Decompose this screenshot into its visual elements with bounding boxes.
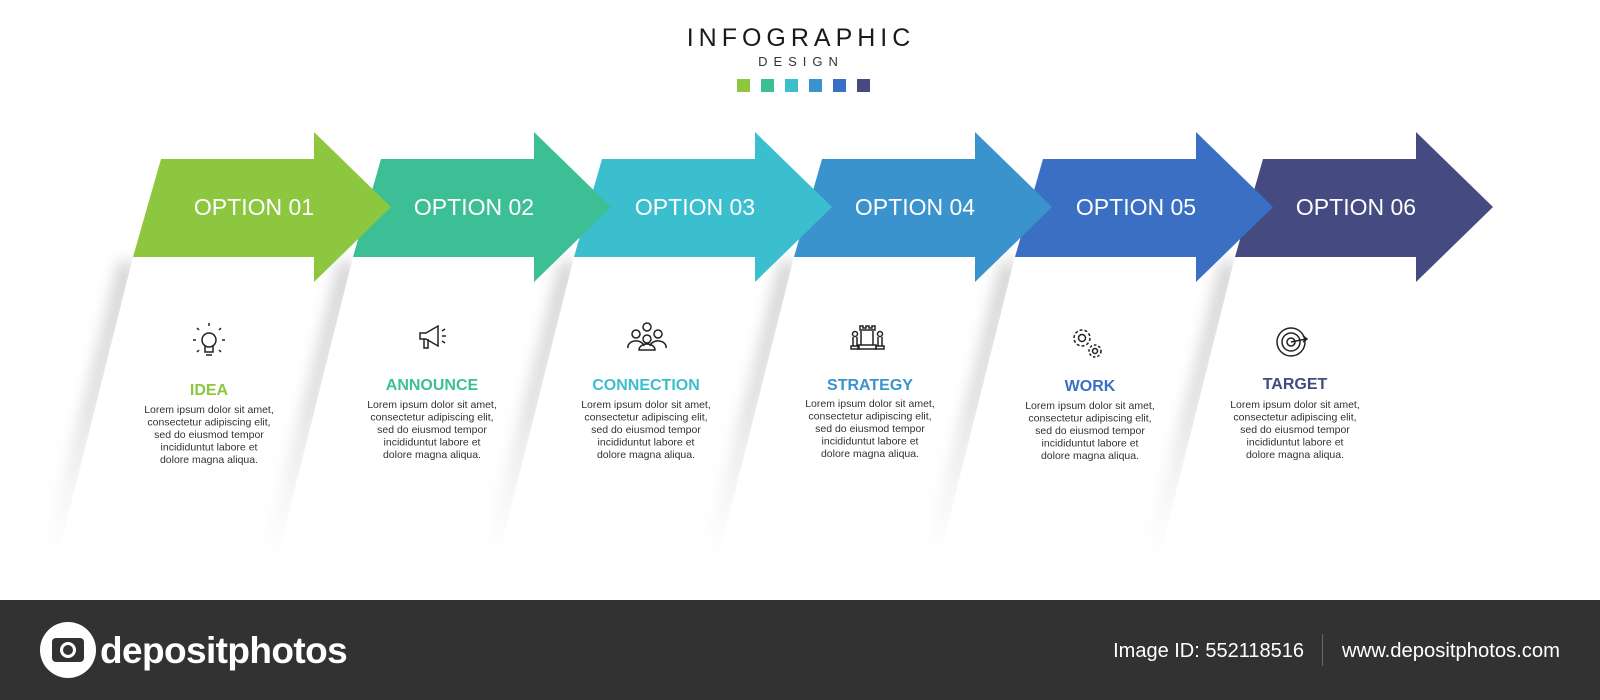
panels with shadows [46, 257, 1500, 556]
text: connection: sed do eiusmod tempor [591, 424, 701, 436]
text: announce: sed do eiusmod tempor [377, 424, 487, 436]
text: announce [367, 377, 497, 461]
text: target: Lorem ipsum dolor sit amet, [1230, 399, 1360, 411]
arrow 01 [133, 132, 391, 282]
title [687, 24, 915, 69]
text: strategy: Lorem ipsum dolor sit amet, [805, 398, 935, 410]
text: target: incididuntut labore et [1247, 436, 1344, 448]
logo [40, 622, 347, 678]
title: DESIGN [758, 54, 844, 69]
text: announce: ANNOUNCE [386, 377, 479, 394]
text: target [1230, 376, 1360, 461]
text: work: incididuntut labore et [1042, 438, 1139, 450]
arrow 06: OPTION 06 [1296, 194, 1416, 220]
text: idea: incididuntut labore et [161, 442, 258, 454]
icon: chess [851, 326, 884, 349]
text: connection [581, 377, 711, 461]
text: work: Lorem ipsum dolor sit amet, [1025, 400, 1155, 412]
icon: gears [1074, 330, 1101, 357]
text: announce: incididuntut labore et [384, 436, 481, 448]
text: idea: Lorem ipsum dolor sit amet, [144, 404, 274, 416]
text: strategy: STRATEGY [827, 377, 913, 394]
website: www.depositphotos.com [1341, 640, 1560, 662]
arrow 03: OPTION 03 [635, 194, 755, 220]
text: strategy [805, 377, 935, 460]
icon: lightbulb [193, 323, 225, 355]
arrow 05: OPTION 05 [1076, 194, 1196, 220]
text: target: TARGET [1263, 376, 1328, 393]
text: announce: dolore magna aliqua. [383, 449, 481, 461]
text: work: dolore magna aliqua. [1041, 450, 1139, 462]
text: idea: dolore magna aliqua. [160, 454, 258, 466]
arrow 02 [353, 132, 611, 282]
text: target: sed do eiusmod tempor [1240, 424, 1350, 436]
icon: people [628, 323, 666, 350]
text: connection: incididuntut labore et [598, 436, 695, 448]
text: work [1025, 378, 1155, 462]
text: idea: sed do eiusmod tempor [154, 429, 264, 441]
text: work: sed do eiusmod tempor [1035, 425, 1145, 437]
text: idea: consectetur adipiscing elit, [147, 416, 271, 428]
text: connection: dolore magna aliqua. [597, 449, 695, 461]
text: target: consectetur adipiscing elit, [1233, 412, 1357, 424]
text: connection: Lorem ipsum dolor sit amet, [581, 399, 711, 411]
logo: depositphotos [100, 630, 347, 671]
title: INFOGRAPHIC [687, 24, 915, 52]
text: target: dolore magna aliqua. [1246, 449, 1344, 461]
arrow 05 [1015, 132, 1273, 282]
text: strategy: sed do eiusmod tempor [815, 423, 925, 435]
arrow 04: OPTION 04 [855, 194, 975, 220]
text: announce: Lorem ipsum dolor sit amet, [367, 399, 497, 411]
text: connection: CONNECTION [592, 377, 700, 394]
arrow 02: OPTION 02 [414, 194, 534, 220]
text: idea: IDEA [190, 382, 229, 399]
icon: megaphone [420, 326, 446, 348]
text: work: WORK [1065, 378, 1116, 395]
footer bar [0, 600, 1600, 700]
arrow 06 [1235, 132, 1493, 282]
text: strategy: incididuntut labore et [822, 436, 919, 448]
text: work: consectetur adipiscing elit, [1028, 412, 1152, 424]
text: strategy: dolore magna aliqua. [821, 448, 919, 460]
arrow 01: OPTION 01 [194, 194, 314, 220]
icon: target [1277, 328, 1307, 356]
color squares [737, 79, 870, 92]
text: idea [144, 382, 274, 466]
image id: Image ID: 552118516 [1113, 640, 1304, 662]
arrow 04 [794, 132, 1052, 282]
arrow 03 [574, 132, 832, 282]
text: connection: consectetur adipiscing elit, [584, 412, 708, 424]
text: announce: consectetur adipiscing elit, [370, 412, 494, 424]
text: strategy: consectetur adipiscing elit, [808, 410, 932, 422]
